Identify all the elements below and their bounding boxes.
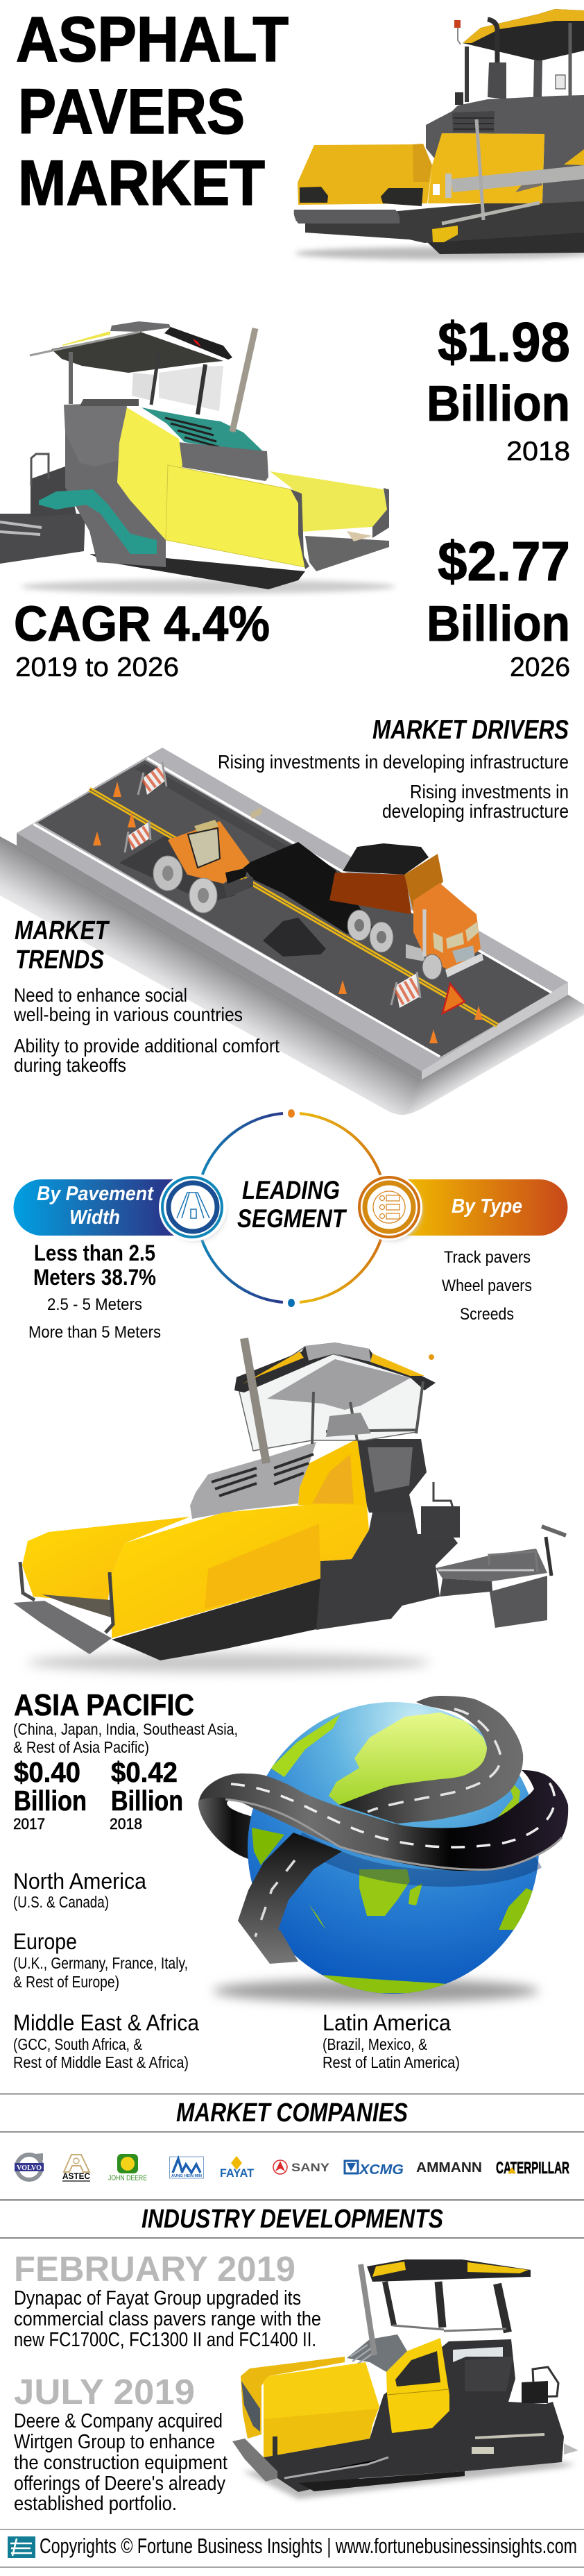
value 2026 <box>427 530 570 682</box>
CAGR: CAGR 4.4% <box>14 597 270 652</box>
logo: sany: SANY <box>291 2161 330 2174</box>
company logos <box>15 2153 569 2182</box>
by pavement width pill: By Pavement <box>37 1183 154 1205</box>
asia pacific: (China, Japan, India, Southeast Asia, <box>13 1720 238 1738</box>
hopper front <box>264 2362 379 2457</box>
asia pacific <box>13 1688 238 1833</box>
cones <box>93 782 483 1043</box>
hopper back <box>22 1517 190 1603</box>
paver photo: bottom right <box>232 2259 578 2499</box>
pavement width list: Less than 2.5 <box>34 1240 155 1265</box>
asia pacific: $0.42 <box>111 1756 178 1788</box>
leading segment heading: LEADING <box>242 1176 340 1204</box>
lower road <box>238 1833 342 1964</box>
europe: & Rest of Europe) <box>13 1973 119 1991</box>
development: july 2019: offerings of Deere's already <box>14 2473 225 2495</box>
development: july 2019 <box>14 2372 227 2515</box>
development: february 2019: Dynapac of Fayat Group upgraded its <box>14 2287 301 2309</box>
logo: xcmg <box>345 2161 404 2178</box>
value 2026: Billion <box>427 596 570 652</box>
middle east and africa: Rest of Middle East & Africa) <box>13 2053 189 2071</box>
footer <box>0 2529 584 2568</box>
leading segment ring <box>201 1109 381 1307</box>
development: july 2019: the construction equipment <box>14 2452 227 2474</box>
kerb block <box>250 807 262 819</box>
road illustration <box>0 748 584 1115</box>
logo: ammann: AMMANN <box>416 2160 482 2175</box>
value 2026: $2.77 <box>438 530 570 592</box>
market trends: well-being in various countries <box>13 1004 243 1025</box>
upper road <box>339 1696 523 1824</box>
by pavement width pill: Width <box>69 1206 120 1229</box>
road shadow <box>0 836 422 1115</box>
market companies heading: MARKET COMPANIES <box>176 2098 408 2128</box>
paver rollers <box>294 210 400 224</box>
paver track <box>424 229 584 254</box>
dump truck <box>329 843 483 979</box>
hopper <box>270 471 387 532</box>
latin america: Latin America <box>323 2010 451 2035</box>
market drivers <box>218 715 569 822</box>
asia pacific: ASIA PACIFIC <box>14 1688 194 1722</box>
north america: North America <box>13 1869 146 1894</box>
screed <box>436 1549 547 1581</box>
title: MARKET <box>18 148 265 219</box>
icon: road <box>177 1193 209 1218</box>
door <box>386 2338 449 2433</box>
type list: Wheel pavers <box>442 1277 532 1295</box>
leading segment heading <box>237 1176 347 1233</box>
europe: Europe <box>13 1929 77 1954</box>
logo: astec: ASTEC <box>62 2171 90 2181</box>
development: july 2019: Deere & Company acquired <box>14 2410 223 2432</box>
footer logo <box>8 2536 35 2558</box>
asphalt strip <box>242 842 375 934</box>
development: february 2019: new FC1700C, FC1300 II and FC1400 II. <box>14 2329 316 2351</box>
globe with roads <box>198 1696 568 2003</box>
industry developments heading: INDUSTRY DEVELOPMENTS <box>141 2205 443 2234</box>
front face <box>112 1504 369 1638</box>
cab <box>239 1347 423 1451</box>
hood <box>141 407 263 451</box>
chassis <box>316 1513 458 1630</box>
middle east and africa: Middle East & Africa <box>13 2010 199 2035</box>
market trends: TRENDS <box>15 945 104 975</box>
logo: ahm <box>169 2157 204 2178</box>
CAGR <box>14 597 270 682</box>
type list: Screeds <box>460 1305 514 1324</box>
grader <box>153 820 253 913</box>
north america <box>13 1869 146 1911</box>
pavement width list <box>28 1240 161 1342</box>
middle east and africa: (GCC, South Africa, & <box>13 2035 142 2053</box>
market trends: during takeoffs <box>14 1054 126 1076</box>
land <box>329 1712 488 1805</box>
logo: john deere <box>108 2154 147 2182</box>
roof <box>361 2264 375 2355</box>
latin america: Rest of Latin America) <box>323 2053 460 2071</box>
logo: ahm: AUNG HEIN MIN <box>171 2174 202 2178</box>
asia pacific: $0.40 <box>14 1756 80 1788</box>
development: july 2019: established portfolio. <box>14 2493 177 2515</box>
back road loop <box>198 1774 255 1859</box>
development: july 2019: JULY 2019 <box>14 2372 195 2411</box>
exhaust <box>244 1338 266 1463</box>
pavement width list: 2.5 - 5 Meters <box>47 1295 142 1314</box>
latin america: (Brazil, Mexico, & <box>323 2035 427 2053</box>
asia pacific: 2018 <box>110 1815 142 1833</box>
development: february 2019: commercial class pavers range with the <box>14 2308 321 2330</box>
market trends: MARKET <box>15 916 110 945</box>
value 2018 <box>427 311 570 466</box>
type list <box>442 1248 532 1324</box>
paver roof <box>463 9 584 61</box>
value 2026: 2026 <box>510 653 570 682</box>
by type pill <box>356 1174 567 1240</box>
north america: (U.S. & Canada) <box>13 1893 109 1911</box>
by pavement width pill <box>14 1173 227 1241</box>
title: PAVERS <box>18 76 245 147</box>
barriers <box>125 762 420 1008</box>
middle east and africa <box>13 2010 199 2071</box>
value 2018: $1.98 <box>438 311 570 373</box>
value 2018: Billion <box>427 376 570 432</box>
tar pile <box>263 918 326 957</box>
warning sign <box>443 984 465 1013</box>
paver photo: large yellow <box>13 1338 566 1672</box>
hopper back <box>241 2357 345 2439</box>
development: february 2019 <box>14 2249 321 2351</box>
paver photo: yellow and teal <box>0 321 395 594</box>
side panel <box>298 1439 367 1506</box>
icon: list <box>373 1191 405 1223</box>
market trends <box>13 916 280 1076</box>
europe <box>13 1929 188 1991</box>
leading segment heading: SEGMENT <box>237 1204 347 1233</box>
logo: sany <box>273 2160 330 2174</box>
logo: xcmg: XCMG <box>359 2162 404 2178</box>
title <box>16 4 289 219</box>
logo: astec <box>62 2155 90 2182</box>
track <box>298 2471 465 2491</box>
pavement width list: More than 5 Meters <box>28 1323 161 1342</box>
development: february 2019: FEBRUARY 2019 <box>14 2249 295 2289</box>
road slab <box>17 833 422 1079</box>
logo: fayat: FAYAT <box>220 2166 255 2180</box>
asia pacific: Billion <box>14 1785 87 1817</box>
title: ASPHALT <box>16 4 289 75</box>
hood <box>347 2334 407 2372</box>
market trends: Need to enhance social <box>14 984 187 1006</box>
market trends: Ability to provide additional comfort <box>14 1035 280 1057</box>
logo: volvo <box>15 2153 44 2180</box>
pavement width list: Meters 38.7% <box>33 1265 156 1290</box>
rear screed <box>0 514 85 564</box>
logo: volvo: VOLVO <box>17 2164 42 2172</box>
logo: john deere: JOHN DEERE <box>108 2174 147 2182</box>
by type pill: By Type <box>452 1195 522 1218</box>
globe <box>248 1702 539 1994</box>
asia pacific: 2017 <box>13 1815 45 1833</box>
front road <box>200 1770 568 1871</box>
hood <box>190 1442 316 1519</box>
chassis <box>264 2339 564 2492</box>
paver photo: top right <box>294 9 584 260</box>
value 2018: 2018 <box>506 437 570 466</box>
asia pacific: Billion <box>111 1785 183 1817</box>
logo: fayat <box>220 2156 255 2180</box>
front rollers <box>13 1601 112 1654</box>
europe: (U.K., Germany, France, Italy, <box>13 1954 188 1972</box>
front plate <box>232 2439 277 2482</box>
cab roof <box>51 332 223 373</box>
development: july 2019: Wirtgen Group to enhance <box>14 2431 215 2453</box>
road shadow on globe <box>298 1840 538 1878</box>
asia pacific: & Rest of Asia Pacific) <box>13 1738 149 1756</box>
latin america <box>323 2010 460 2071</box>
track <box>112 1579 402 1660</box>
type list: Track pavers <box>444 1248 531 1267</box>
CAGR: 2019 to 2026 <box>15 653 179 682</box>
